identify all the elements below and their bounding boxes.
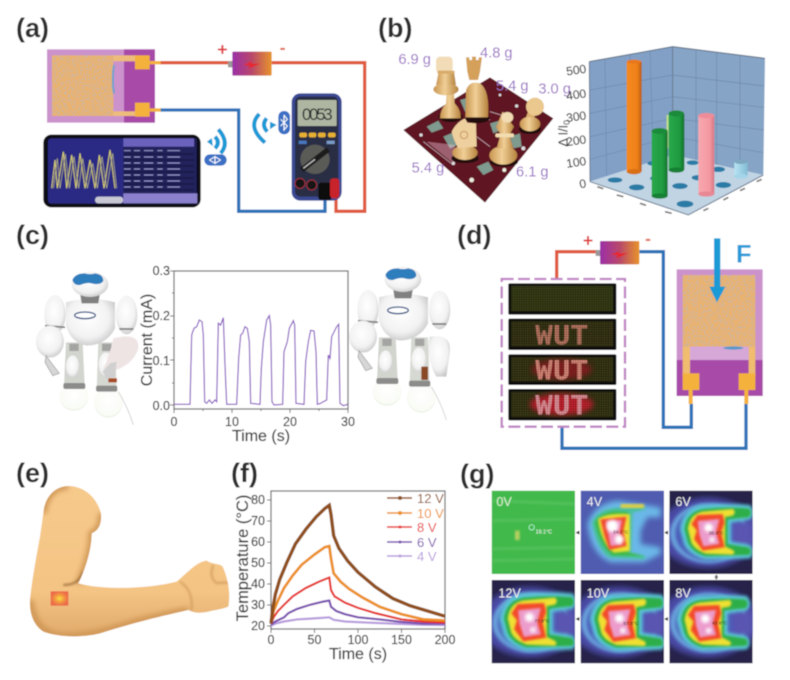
x tick labels: 0 xyxy=(171,415,178,429)
thermal tile 8 V: 42.6°C xyxy=(712,620,728,626)
thermal tile 0 V: 19.1°C xyxy=(536,529,552,535)
battery xyxy=(228,52,272,76)
temperature curves xyxy=(271,505,445,626)
LED panel medium: WUT xyxy=(535,356,588,389)
chart y axis title: 0 xyxy=(562,120,572,125)
x tick labels: 10 xyxy=(225,415,239,429)
x tick labels: 20 xyxy=(283,415,297,429)
sensor on robot wrist xyxy=(108,378,117,382)
panel: c robot right xyxy=(349,267,450,420)
chart axis ticks: 0 xyxy=(579,176,587,191)
minus sign: - xyxy=(280,37,286,57)
weight labels xyxy=(398,45,571,181)
thermal tile 4 V: 24.1°C xyxy=(613,529,629,535)
curve 8 V xyxy=(271,578,445,624)
chess king xyxy=(433,57,463,122)
LED panel bright xyxy=(508,389,616,423)
chart axis ticks: 200 xyxy=(565,132,587,149)
panel: a circuit with multimeter and phone xyxy=(43,37,365,211)
axis ticks xyxy=(170,271,348,413)
heading: panel e: (e) xyxy=(16,458,49,488)
thermal tile 6 V: 6V xyxy=(675,495,691,509)
thermal tile 6 V xyxy=(668,490,754,575)
legend: 4 V xyxy=(417,549,437,564)
thermal tile 8 V: 8V xyxy=(675,586,691,600)
thermal tile 10 V xyxy=(580,579,665,664)
weight labels: 6.9 g xyxy=(398,52,431,68)
panel: c robot left xyxy=(36,272,138,425)
x tick labels: 150 xyxy=(391,633,412,647)
y axis title: Current (mA) xyxy=(139,294,156,386)
y tick labels xyxy=(251,493,265,633)
x tick labels: 30 xyxy=(341,415,355,429)
chart axis ticks: 400 xyxy=(565,86,587,103)
icon: bluetooth phone side xyxy=(204,154,227,166)
heading: panel c: (c) xyxy=(16,220,49,250)
chess knight back xyxy=(465,82,490,123)
chart axis ticks: 300 xyxy=(565,108,587,125)
thermal tile 0 V: 0V xyxy=(496,495,512,509)
bar light blue xyxy=(734,159,748,179)
chart y axis title: Δ I/I xyxy=(557,125,571,147)
sensor device xyxy=(47,49,161,123)
pressed sensor device xyxy=(677,269,763,404)
arrows between tiles xyxy=(576,531,718,621)
y tick labels: 0.0 xyxy=(153,399,170,413)
heading: panel a: (a) xyxy=(16,13,49,43)
chart axis ticks xyxy=(565,62,587,191)
panel: e arm with heater patch xyxy=(30,486,230,637)
y tick labels: 40 xyxy=(251,577,265,591)
axis ticks xyxy=(267,500,445,633)
chart walls and floor xyxy=(589,47,765,215)
battery xyxy=(596,241,639,264)
panel: g thermal images xyxy=(480,491,758,663)
icon: wifi signal meter side xyxy=(254,114,275,143)
heading: panel g: (g) xyxy=(460,459,494,489)
plot frame xyxy=(271,491,445,629)
legend: 6 V xyxy=(417,535,437,550)
weight labels: 5.4 g xyxy=(412,161,444,177)
LED panel bright: WUT xyxy=(535,390,588,423)
LED panel dim xyxy=(508,319,616,354)
panel: b chess pieces on sensor array xyxy=(398,45,571,203)
chess knight front xyxy=(451,118,479,163)
y axis title: Temperature (°C) xyxy=(234,495,252,621)
arrow: force xyxy=(709,238,725,302)
plus sign: + xyxy=(217,39,228,59)
x axis title: Time (s) xyxy=(329,646,387,663)
arm shading xyxy=(30,486,230,637)
legend: 12 V xyxy=(417,491,444,506)
robot forearm and hand xyxy=(429,336,450,377)
weight labels: 6.1 g xyxy=(516,165,549,181)
meter reading: 0053 xyxy=(302,105,333,124)
robot forearm xyxy=(103,336,138,374)
dashed LED enclosure xyxy=(502,279,625,427)
chess bishop xyxy=(489,112,518,167)
phone app with graph and table xyxy=(43,135,201,207)
force label: F xyxy=(736,240,751,268)
arm silhouette xyxy=(30,486,229,636)
curve 12 V xyxy=(271,505,445,624)
y tick labels xyxy=(153,264,170,413)
y tick labels: 30 xyxy=(251,598,265,612)
x tick labels: 200 xyxy=(435,633,455,647)
bar orange xyxy=(627,60,642,174)
LED panel off xyxy=(508,283,616,315)
robot hand xyxy=(103,362,117,378)
LED panel dim: WUT xyxy=(535,321,588,354)
heading: panel b: (b) xyxy=(378,13,412,43)
y tick labels: 60 xyxy=(251,535,265,549)
chess rook xyxy=(466,57,482,80)
curve 4 V xyxy=(271,617,445,626)
y tick labels: 20 xyxy=(251,619,265,633)
blue wire xyxy=(160,110,325,211)
x axis title: Time (s) xyxy=(232,428,290,445)
blue wires xyxy=(562,252,746,448)
current trace xyxy=(174,316,348,406)
chess pawn xyxy=(519,98,544,134)
bar green front xyxy=(652,128,668,199)
thermal tile 4 V xyxy=(581,491,664,574)
bar green back xyxy=(667,110,684,173)
thermal tile 8 V xyxy=(668,579,754,664)
thermal tile 10 V: 10V xyxy=(587,586,610,600)
curve 10 V xyxy=(271,546,445,622)
plot frame xyxy=(174,271,348,409)
bar pink xyxy=(698,113,714,197)
thermal tile 6 V: 35.8°C xyxy=(709,531,724,537)
x tick labels xyxy=(268,633,455,647)
chart: b 3D bar chart xyxy=(557,47,765,215)
y tick labels: 0.2 xyxy=(153,309,170,323)
y tick labels: 70 xyxy=(251,514,265,528)
heater patch xyxy=(51,591,68,606)
multimeter xyxy=(292,93,342,201)
chart axis ticks: 100 xyxy=(565,154,587,171)
y tick labels: 80 xyxy=(251,493,265,507)
red wire xyxy=(557,252,600,278)
sensor board xyxy=(403,77,553,203)
panel: d LED circuit xyxy=(502,228,763,448)
thermal tile 4 V: 4V xyxy=(587,495,603,509)
plus sign: + xyxy=(583,230,593,250)
heading: panel d: (d) xyxy=(457,220,491,250)
minus sign: - xyxy=(645,228,651,248)
x tick labels: 100 xyxy=(348,633,368,647)
y tick labels: 0.1 xyxy=(153,354,170,368)
curve 6 V xyxy=(271,601,445,625)
chart floor tick marks xyxy=(597,179,762,213)
thermal tile 12 V xyxy=(490,579,576,664)
icon: bluetooth meter side xyxy=(278,111,290,134)
legend xyxy=(387,491,444,564)
chart: c current versus time xyxy=(139,264,355,445)
y tick labels: 0.3 xyxy=(153,264,170,278)
x tick labels: 50 xyxy=(308,633,321,647)
chart: f temperature versus time xyxy=(234,491,455,663)
y tick labels: 50 xyxy=(251,556,265,570)
weight labels: 3.0 g xyxy=(538,81,571,97)
chart axis ticks: 500 xyxy=(565,62,587,78)
sensor on robot arm xyxy=(421,367,428,380)
thermal tile 12 V: 77.8°C xyxy=(534,619,550,625)
thermal tile 12 V: 12V xyxy=(498,586,521,600)
thermal tile 10 V: 57.6°C xyxy=(623,621,639,627)
thermal tile 0 V xyxy=(492,491,575,574)
legend: 10 V xyxy=(417,506,444,521)
x tick labels xyxy=(171,415,355,429)
heading: panel f: (f) xyxy=(231,458,258,488)
icon: wifi signal phone side xyxy=(208,129,225,153)
legend: 8 V xyxy=(417,520,437,535)
red wire xyxy=(160,63,365,211)
weight labels: 5.4 g xyxy=(496,79,529,95)
LED panel medium xyxy=(508,354,616,389)
weight labels: 4.8 g xyxy=(480,45,513,61)
x tick labels: 0 xyxy=(268,633,275,647)
